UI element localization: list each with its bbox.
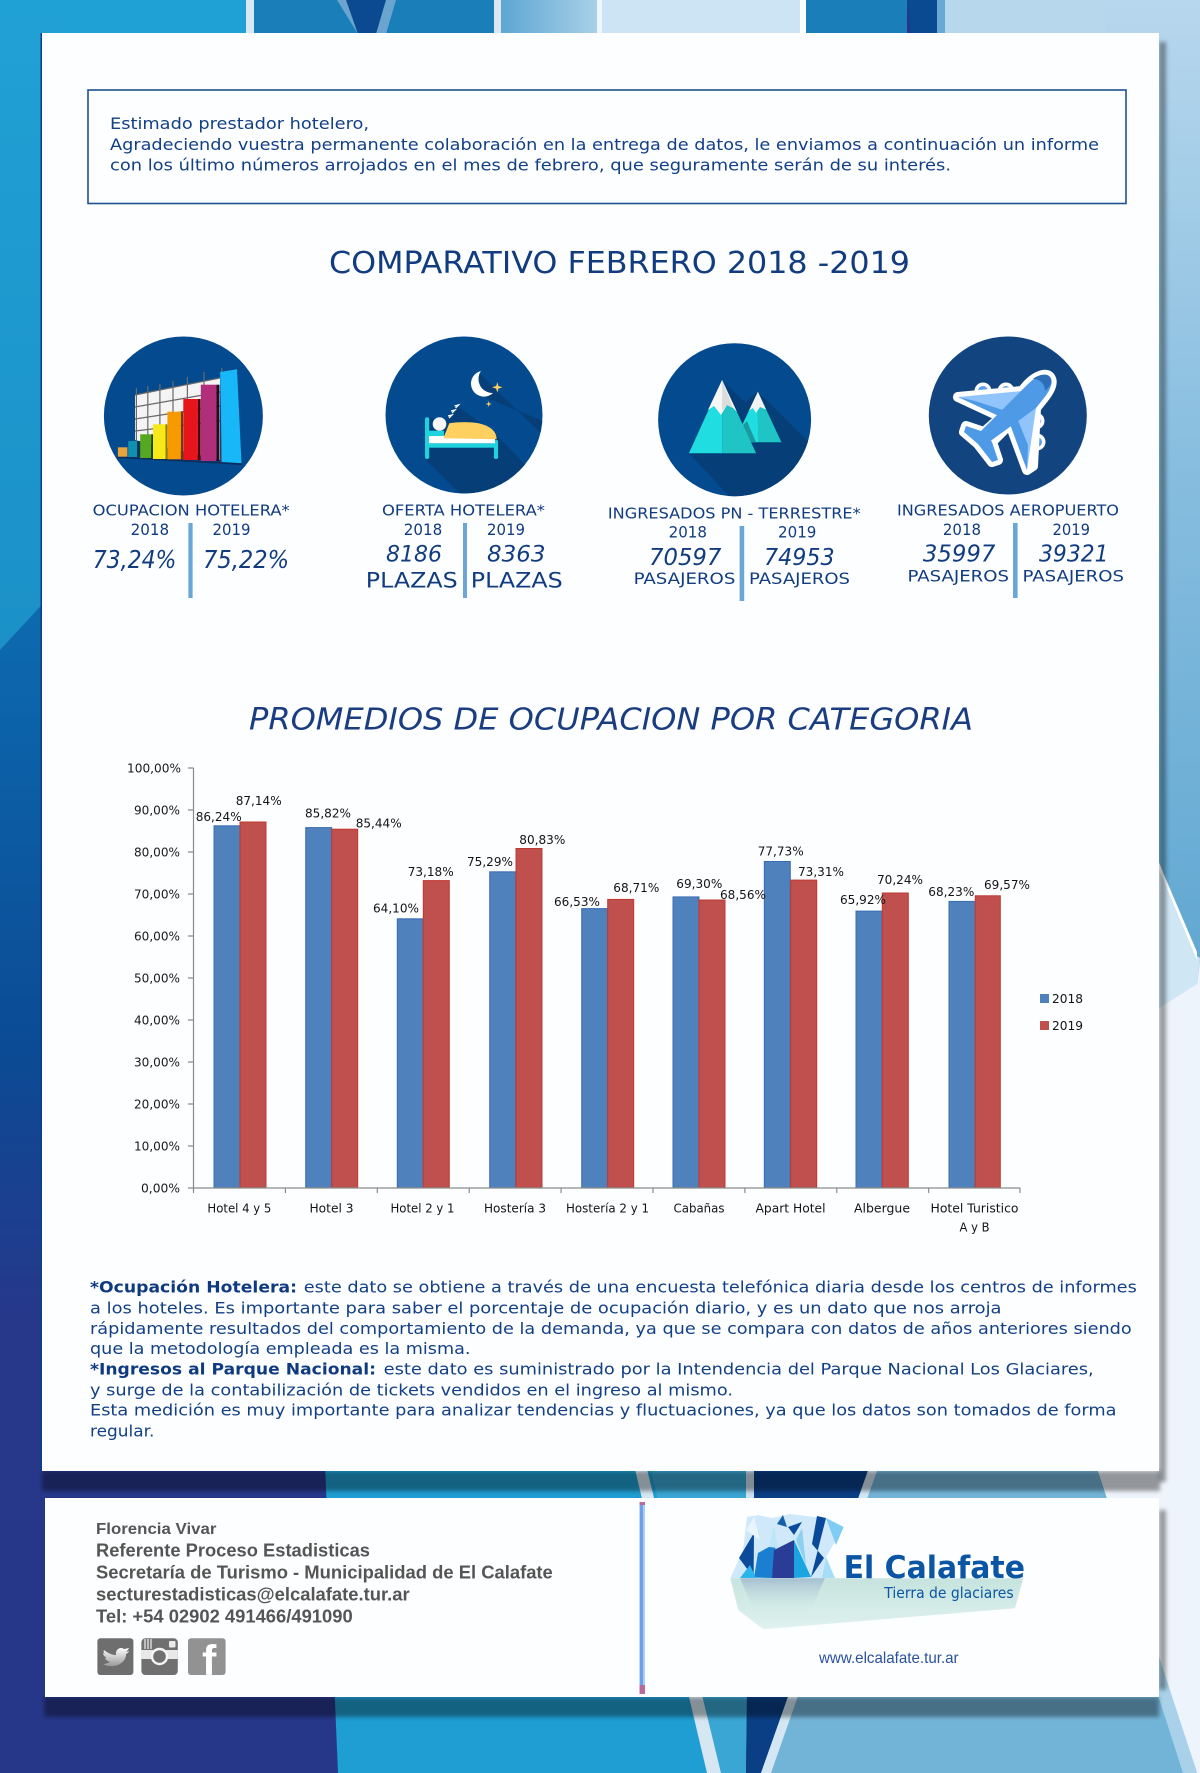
values: [93, 545, 289, 574]
category labels: Hotel Turistico: [930, 1200, 1018, 1216]
website: www.elcalafate.tur.ar: [818, 1650, 959, 1667]
y axis: 10,00%: [134, 1138, 180, 1154]
main white panel: [40, 33, 1159, 1471]
values: PLAZAS: [366, 568, 458, 593]
footer divider: [640, 1502, 645, 1694]
y axis: 90,00%: [134, 802, 180, 818]
values: PASAJEROS: [1022, 567, 1124, 586]
top strip: [60, 0, 246, 34]
icon: twitter: [97, 1638, 133, 1675]
footer panel: [45, 1498, 1159, 1697]
years: 2019: [212, 520, 250, 539]
years: [404, 520, 525, 539]
logo: reflection plate: [730, 1578, 1023, 1629]
value labels: 69,57%: [984, 877, 1030, 892]
stat block: oferta hotelera: [366, 336, 563, 598]
bottom strip: [325, 1465, 735, 1773]
contact details: [96, 1521, 553, 1626]
value labels: 73,31%: [798, 864, 844, 879]
methodology notes: este dato se obtiene a través de una encuesta telefónica diaria desde los centros de informes: [304, 1278, 1137, 1296]
years: 2019: [778, 522, 816, 541]
methodology notes: que la metodología empleada es la misma.: [90, 1339, 471, 1358]
category labels: Hotel 3: [310, 1200, 354, 1216]
methodology notes: y surge de la contabilización de tickets vendidos en el ingreso al mismo.: [90, 1380, 733, 1400]
value labels: 85,44%: [356, 816, 402, 830]
value labels: 69,30%: [676, 876, 722, 891]
value labels: 68,56%: [720, 887, 766, 902]
values: PLAZAS: [471, 568, 563, 593]
label: INGRESADOS AEROPUERTO: [897, 502, 1119, 520]
values: PASAJEROS: [634, 569, 735, 588]
stat block: ingresados aeropuerto: [897, 336, 1124, 598]
intro text: [110, 114, 1099, 174]
category labels: Cabañas: [674, 1200, 724, 1216]
label: INGRESADOS PN - TERRESTRE*: [608, 504, 861, 522]
methodology notes: *Ingresos al Parque Nacional:: [90, 1360, 376, 1378]
category labels: A y B: [960, 1220, 990, 1234]
value labels: 73,18%: [408, 864, 454, 879]
values: PASAJEROS: [908, 567, 1009, 586]
methodology notes: *Ocupación Hotelera:: [90, 1278, 297, 1296]
years: [669, 522, 816, 541]
legend: [1040, 991, 1083, 1033]
category labels: Hostería 3: [484, 1200, 546, 1216]
values: PASAJEROS: [749, 569, 850, 588]
years: [131, 520, 250, 539]
value labels: 68,23%: [928, 884, 974, 899]
stat block: ingresados parque nacional: [608, 343, 861, 601]
category labels: Hotel 4 y 5: [207, 1200, 271, 1216]
legend: 2018: [1052, 991, 1083, 1006]
bars 2019: [240, 822, 1000, 1188]
logo tagline: Tierra de glaciares: [883, 1584, 1014, 1602]
intro text: Estimado prestador hotelero,: [110, 114, 369, 133]
values: 8363: [487, 543, 546, 568]
methodology notes: [90, 1278, 1137, 1440]
years: 2018: [669, 522, 707, 541]
logo wordmark: El Calafate: [844, 1550, 1025, 1586]
values: [366, 543, 563, 593]
icon: airplane: [929, 336, 1087, 494]
values: 74953: [764, 545, 835, 571]
value labels: 68,71%: [613, 880, 659, 895]
icon: instagram: [141, 1638, 178, 1675]
y axis: 60,00%: [134, 928, 180, 944]
category labels: Hostería 2 y 1: [566, 1200, 649, 1216]
years: 2019: [1052, 520, 1090, 539]
y axis: 0,00%: [141, 1180, 180, 1196]
years: 2019: [487, 520, 525, 539]
label: OFERTA HOTELERA*: [382, 502, 546, 520]
lower right light facets: [1096, 1465, 1200, 1773]
value labels: 86,24%: [196, 809, 242, 824]
legend: 2019: [1052, 1018, 1083, 1033]
value labels: 87,14%: [236, 793, 282, 808]
value labels: 85,82%: [305, 806, 351, 820]
years: 2018: [404, 520, 442, 539]
icon: bar chart: [104, 336, 263, 496]
title: promedios: PROMEDIOS DE OCUPACION POR CATEGORIA: [249, 702, 973, 738]
bars 2018: [214, 826, 975, 1188]
title: comparativo: COMPARATIVO FEBRERO 2018 -2019: [329, 246, 910, 281]
methodology notes: este dato es suministrado por la Intendencia del Parque Nacional Los Glaciares,: [384, 1360, 1094, 1378]
label: OCUPACION HOTELERA*: [93, 502, 290, 520]
values: 39321: [1039, 542, 1109, 568]
contact details: Secretaría de Turismo - Municipalidad de El Calafate: [96, 1562, 553, 1582]
value labels: 70,24%: [877, 872, 923, 887]
values: 8186: [386, 543, 442, 568]
intro text box: [88, 90, 1126, 204]
value labels: 80,83%: [519, 832, 565, 847]
icon: facebook: f: [202, 1637, 217, 1685]
y axis: 80,00%: [134, 844, 180, 860]
values: 75,22%: [203, 545, 289, 574]
intro text: con los último números arrojados en el mes de febrero, que seguramente serán de su interés.: [110, 156, 951, 174]
value labels: 65,92%: [840, 892, 886, 907]
value labels: [196, 793, 1030, 916]
methodology notes: Esta medición es muy importante para analizar tendencias y fluctuaciones, ya que los datos son tomados de forma: [90, 1400, 1116, 1420]
values: 70597: [649, 545, 722, 571]
x axis: [194, 1188, 1020, 1193]
methodology notes: rápidamente resultados del comportamiento de la demanda, ya que se compara con datos de años anteriores siendo: [90, 1319, 1132, 1338]
years: [943, 520, 1090, 539]
y axis: 100,00%: [127, 760, 181, 776]
category labels: Apart Hotel: [756, 1200, 826, 1216]
values: [908, 542, 1124, 586]
values: 73,24%: [93, 545, 176, 574]
contact details: secturestadisticas@elcalafate.tur.ar: [96, 1584, 410, 1604]
value labels: 64,10%: [373, 900, 419, 916]
y axis: 50,00%: [134, 970, 180, 986]
value labels: 77,73%: [758, 844, 804, 858]
intro text: Agradeciendo vuestra permanente colaboración en la entrega de datos, le enviamos a continuación un informe: [110, 135, 1099, 154]
logo: El Calafate: [730, 1514, 1025, 1629]
years: 2018: [131, 520, 169, 539]
y axis: [127, 760, 194, 1196]
contact details: Florencia Vivar: [96, 1521, 216, 1538]
category labels: Albergue: [854, 1200, 910, 1216]
y axis: 40,00%: [134, 1012, 180, 1028]
icon: sleeping bed: [386, 336, 542, 494]
y axis: 70,00%: [134, 886, 180, 902]
icon: mountains: [658, 343, 815, 500]
values: 35997: [923, 542, 996, 568]
contact details: Tel: +54 02902 491466/491090: [96, 1606, 353, 1626]
methodology notes: a los hoteles. Es importante para saber el porcentaje de ocupación diario, y es un dato que nos arroja: [90, 1298, 1002, 1318]
y axis: 30,00%: [134, 1054, 180, 1070]
category labels: [207, 1200, 1018, 1234]
methodology notes: regular.: [90, 1422, 154, 1440]
stat block: ocupacion hotelera: [93, 336, 290, 598]
value labels: 66,53%: [554, 894, 600, 909]
icon: facebook: [188, 1637, 226, 1685]
logo: iceberg: [730, 1514, 844, 1578]
contact details: Referente Proceso Estadisticas: [96, 1540, 370, 1560]
values: [634, 545, 850, 588]
bar chart: [127, 760, 1083, 1234]
value labels: 75,29%: [467, 854, 513, 869]
years: 2018: [943, 520, 981, 539]
category labels: Hotel 2 y 1: [390, 1200, 454, 1216]
y axis: 20,00%: [134, 1096, 180, 1112]
